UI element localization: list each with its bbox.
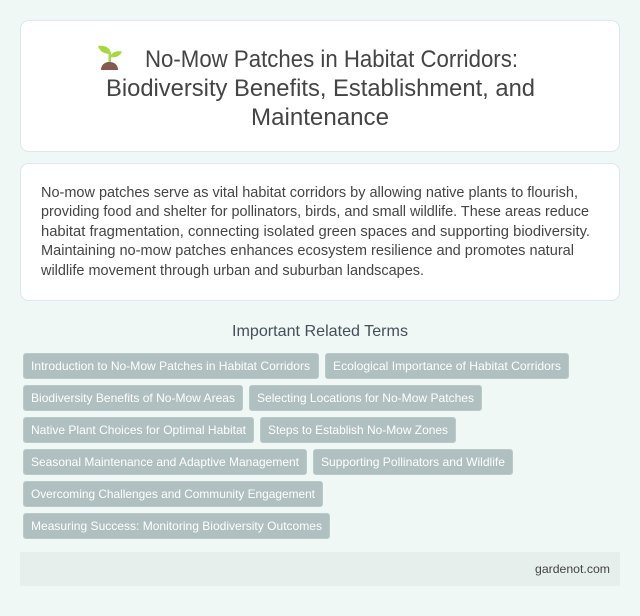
- tag: [260, 418, 456, 442]
- tag: Seasonal Maintenance and Adaptive Management: [31, 455, 300, 469]
- text block: description: providing food and shelter for pollinators, birds, and small wildlife. These areas reduce: [41, 204, 589, 220]
- tag: [24, 418, 254, 442]
- tag: [24, 386, 242, 410]
- title: [106, 46, 535, 131]
- tag: Introduction to No-Mow Patches in Habitat Corridors: [31, 359, 310, 373]
- title: No-Mow Patches in Habitat Corridors:: [145, 46, 518, 73]
- icon: seedling: [98, 46, 122, 70]
- heading: related terms: Important Related Terms: [232, 323, 408, 340]
- text block: description: wildlife movement through urban and suburban landscapes.: [40, 263, 424, 279]
- panel: description card: [20, 164, 620, 300]
- tag list: [24, 354, 568, 538]
- tag: Measuring Success: Monitoring Biodiversity Outcomes: [31, 519, 322, 533]
- footer: gardenot.com: [535, 562, 610, 576]
- text block: description: habitat fragmentation, connecting isolated green spaces and supporting biodiversity.: [41, 224, 590, 240]
- tag: Biodiversity Benefits of No-Mow Areas: [31, 391, 235, 405]
- text block: description: [40, 185, 590, 279]
- tag: [314, 450, 512, 474]
- tag: [24, 514, 330, 538]
- title: Biodiversity Benefits, Establishment, and: [106, 75, 535, 102]
- tag: Selecting Locations for No-Mow Patches: [257, 391, 474, 405]
- tag: [24, 482, 322, 506]
- tag: [250, 386, 482, 410]
- tag: Overcoming Challenges and Community Engagement: [31, 487, 316, 501]
- text block: description: No-mow patches serve as vital habitat corridors by allowing native plants to flourish,: [41, 185, 578, 201]
- tag: Steps to Establish No-Mow Zones: [268, 423, 448, 437]
- tag: Native Plant Choices for Optimal Habitat: [31, 423, 247, 437]
- tag: [326, 354, 568, 378]
- tag: Supporting Pollinators and Wildlife: [321, 455, 505, 469]
- title: Maintenance: [251, 104, 389, 131]
- text block: description: Maintaining no-mow patches enhances ecosystem resilience and promotes natural: [41, 243, 574, 259]
- tag: [24, 354, 318, 378]
- footer: [20, 552, 620, 586]
- panel: title card: [20, 20, 620, 152]
- tag: Ecological Importance of Habitat Corridors: [333, 359, 561, 373]
- tag: [24, 450, 306, 474]
